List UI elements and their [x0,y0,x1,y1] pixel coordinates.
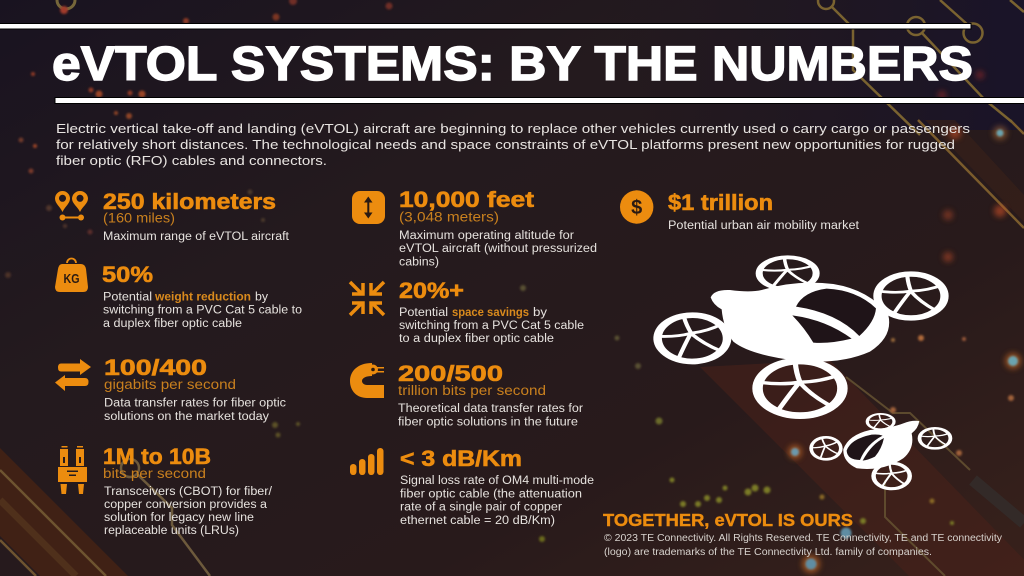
bottom rule [55,98,1024,104]
stat: 20%+: Potential [399,307,448,319]
stat: 1M to 10B: Transceivers (CBOT) for fiber/ [104,486,273,498]
icon: altitude arrows [352,191,385,224]
stat: 20%+: to a duplex fiber optic cable [399,333,554,345]
icon: map pins [55,191,88,220]
intro text: Electric vertical take-off and landing (eVTOL) aircraft are beginning to replace other vehicles currently used o carry cargo or passengers [56,121,971,136]
stat: signal loss: fiber optic cable (the attenuation [400,488,582,500]
stat: 100/400 [55,355,286,423]
stat: 10,000 feet: Maximum operating altitude for [399,230,574,242]
icon: compress arrows [350,282,384,315]
stat: 10,000 feet [352,187,597,268]
stat: 20%+: 20%+ [399,278,464,303]
stat: 10,000 feet: 10,000 feet [399,187,535,212]
stat: 1M to 10B [58,444,273,537]
stat: 100/400: solutions on the market today [104,411,269,423]
stat: 1M to 10B: replaceable units (LRUs) [104,525,239,537]
stat: 10,000 feet: cabins) [399,256,439,268]
copyright [604,533,1002,558]
stat: signal loss: Signal loss rate of OM4 multi-mode [400,475,594,487]
copyright: © 2023 TE Connectivity. All Rights Reserved. TE Connectivity, TE and TE connectivity [604,533,1002,544]
stat: 200/500 [350,361,583,428]
icon: KG weight: KG [64,271,80,286]
icon: signal bars [350,448,384,475]
icon: KG weight [55,258,88,292]
stat: 250 kilometers [55,189,290,243]
stat: 250 kilometers: (160 miles) [103,210,175,226]
stat: 200/500: Theoretical data transfer rates for [398,403,583,415]
stat: 200/500: fiber optic solutions in the future [398,416,578,428]
icon: dollar coin: $ [631,197,642,219]
stat: $1 trillion [620,190,860,232]
icon: transceiver [58,446,87,494]
stat: signal loss: ethernet cable = 20 dB/Km) [400,515,555,527]
stat: 100/400: gigabits per second [104,377,236,392]
stat: $1 trillion: $1 trillion [668,190,773,215]
stat: 1M to 10B: solution for legacy new line [104,512,254,524]
stat: 50%: Potential [103,292,152,304]
stat: 50%: a duplex fiber optic cable [103,318,242,330]
intro text [56,121,971,168]
stat: 100/400: 100/400 [104,355,207,380]
title: eVTOL SYSTEMS: BY THE NUMBERS [52,38,973,91]
stat: 50%: by [255,292,268,304]
stat: signal loss: rate of a single pair of copper [400,502,562,514]
stat: 200/500: 200/500 [398,361,503,386]
stat: 50%: switching from a PVC Cat 5 cable to [103,304,302,316]
stat: 50%: weight reduction [154,292,251,304]
stat: signal loss [350,446,594,527]
top rule [0,24,971,29]
stat: 50% [55,258,302,330]
intro text: fiber optic (RFO) cables and connectors. [56,153,327,168]
icon: two-way arrows [55,359,91,391]
stat: 250 kilometers: 250 kilometers [103,189,276,214]
copyright: (logo) are trademarks of the TE Connectivity Ltd. family of companies. [604,547,932,558]
stat: 250 kilometers: Maximum range of eVTOL aircraft [103,231,290,243]
small eVTOL aircraft illustration [809,414,950,489]
stat: 20%+: by [533,307,547,319]
stat: 100/400: Data transfer rates for fiber optic [104,398,286,410]
stat: signal loss: < 3 dB/Km [400,446,522,471]
icon: dollar coin [620,190,653,224]
stat: 200/500: trillion bits per second [398,383,546,398]
stat: 10,000 feet: eVTOL aircraft (without pressurized [399,243,597,255]
stat: 50%: 50% [102,262,153,287]
stat: 20%+: switching from a PVC Cat 5 cable [399,320,584,332]
icon: fiber connector [350,363,384,398]
stat: 10,000 feet: (3,048 meters) [399,210,499,224]
stat: 20%+ [350,278,584,345]
stat: $1 trillion: Potential urban air mobility market [668,220,860,232]
stat: 1M to 10B: copper conversion provides a [104,499,268,511]
stat: 1M to 10B: 1M to 10B [103,444,211,469]
intro text: for relatively short distances. The technological needs and space constraints of eVTOL platforms present new opportunities for rugged [56,137,955,152]
stat: 1M to 10B: bits per second [103,466,206,481]
stat: 20%+: space savings [452,307,529,319]
closing tagline: TOGETHER, eVTOL IS OURS [603,510,853,530]
large eVTOL aircraft illustration [653,257,944,416]
